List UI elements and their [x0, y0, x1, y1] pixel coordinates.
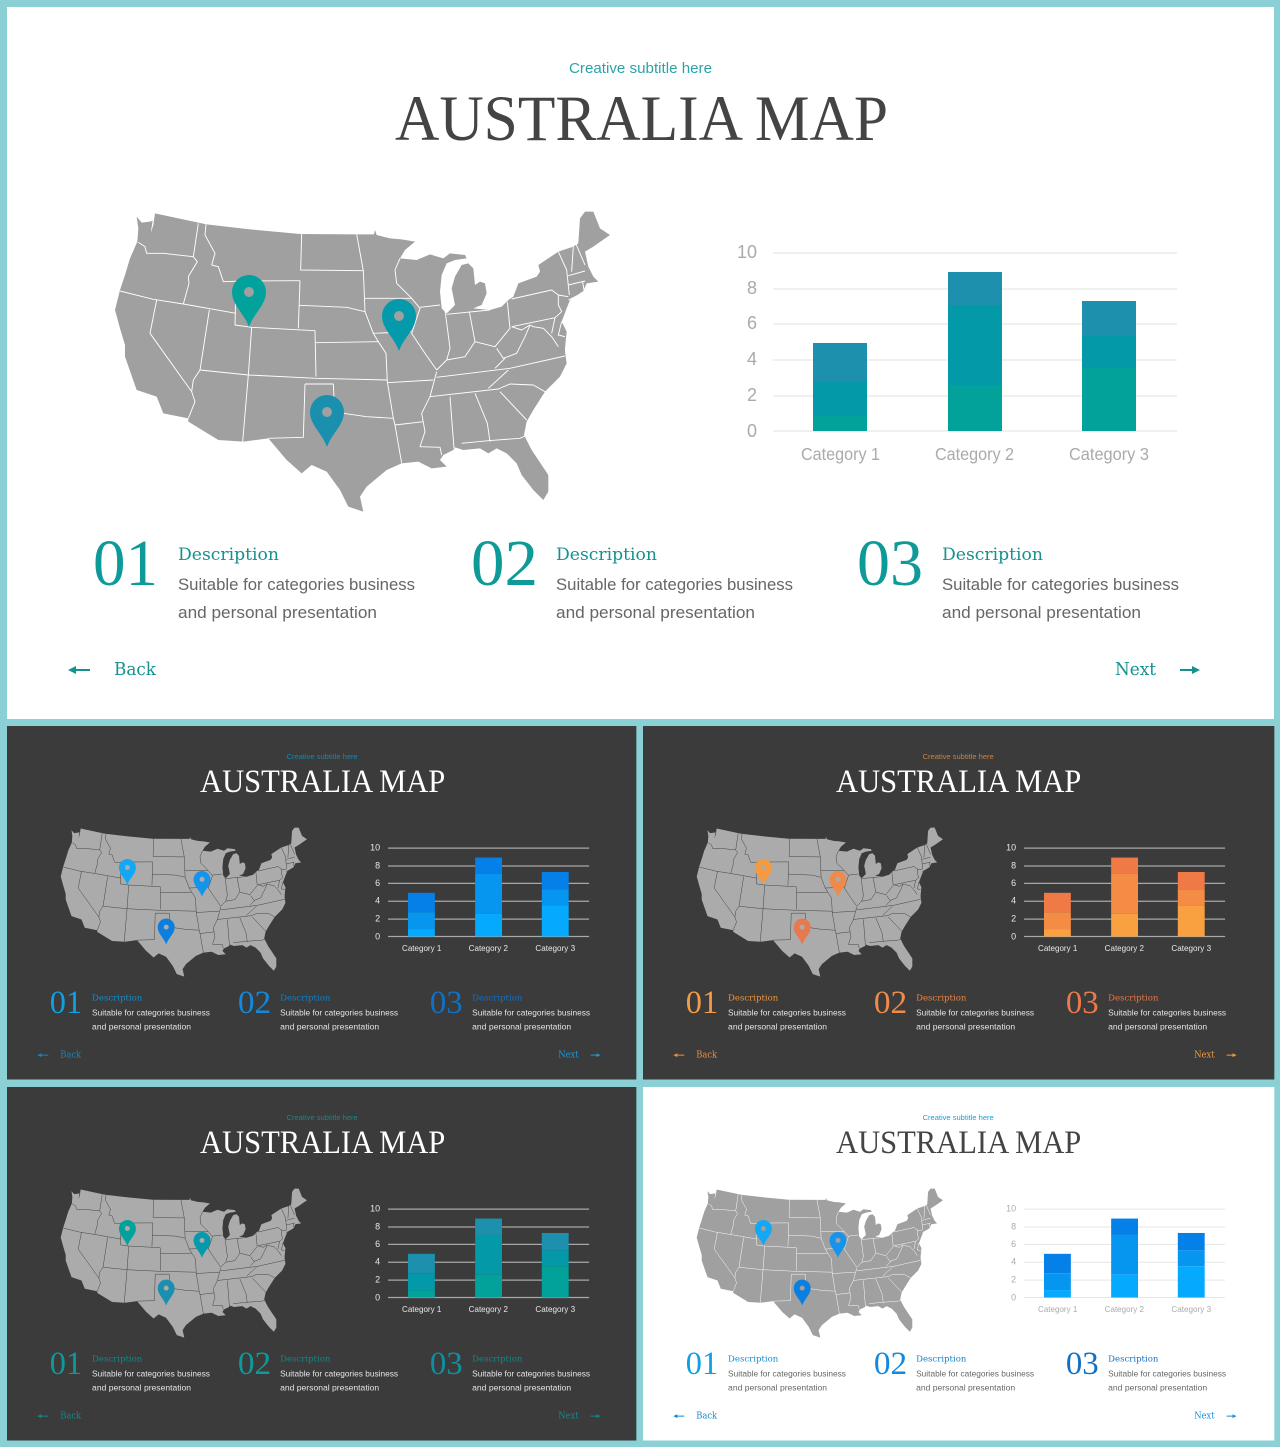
bar chart: Category 3	[1069, 444, 1149, 464]
item 01: 01	[93, 527, 158, 600]
item 02: Description	[916, 1354, 967, 1364]
item 02: and personal presentation	[280, 1021, 379, 1031]
bar chart: Category 1	[402, 1304, 441, 1314]
map of the USA with pins	[697, 1189, 943, 1338]
pin 1	[119, 1220, 136, 1246]
pin 2	[194, 871, 210, 897]
item 03: and personal presentation	[1108, 1021, 1207, 1031]
item 02: Suitable for categories business	[556, 575, 793, 594]
next link	[558, 1051, 601, 1061]
item 03: and personal presentation	[472, 1382, 571, 1392]
bar chart: Category 3	[1171, 943, 1211, 953]
pin 2	[830, 1232, 846, 1258]
bar chart: Category 2	[1105, 943, 1144, 953]
bar chart: 6	[1011, 878, 1016, 888]
title: AUSTRALIA MAP	[200, 1124, 445, 1160]
item 01	[50, 985, 210, 1031]
pin 2	[194, 1232, 210, 1258]
bar chart: 4	[747, 349, 757, 369]
pin 1	[755, 1220, 772, 1246]
bar chart: 2	[375, 914, 380, 924]
item 02: and personal presentation	[280, 1382, 379, 1392]
bar chart: 6	[375, 1239, 380, 1249]
bar chart	[1006, 1204, 1225, 1314]
item 03: Description	[1108, 1354, 1159, 1364]
bar chart: 4	[1011, 1257, 1016, 1267]
item 01: 01	[50, 985, 82, 1021]
bar chart: Category 1	[801, 444, 880, 464]
item 01: and personal presentation	[178, 603, 377, 622]
item 02: 02	[874, 985, 907, 1021]
bar chart: 6	[375, 878, 380, 888]
panel: dark teal slide	[7, 1087, 636, 1441]
item 01: Description	[728, 993, 779, 1003]
item 03: Description	[942, 545, 1043, 565]
item 02	[238, 1346, 398, 1392]
item 02: Suitable for categories business	[916, 1368, 1034, 1378]
back link	[673, 1051, 718, 1061]
bar chart: 8	[375, 861, 380, 870]
back link	[673, 1412, 718, 1422]
map of the USA with pins	[697, 828, 943, 977]
item 02: Description	[280, 1354, 331, 1364]
bar chart: 2	[1011, 1275, 1016, 1285]
item 02: 02	[238, 985, 271, 1021]
item 02: Description	[916, 993, 967, 1003]
back link	[68, 659, 157, 680]
bar chart: 4	[1011, 896, 1016, 906]
item 02: 02	[238, 1346, 271, 1382]
item 01	[93, 527, 415, 622]
next link: Next	[1194, 1412, 1215, 1422]
bar chart: 2	[747, 385, 757, 405]
title: AUSTRALIA MAP	[836, 1124, 1081, 1160]
next link	[1115, 659, 1200, 680]
bar chart: Category 1	[1038, 943, 1077, 953]
bar chart: 8	[375, 1222, 380, 1231]
bar chart: 10	[1006, 843, 1016, 853]
bar chart: 4	[375, 896, 380, 906]
item 03: Description	[1108, 993, 1159, 1003]
bar chart: Category 1	[1038, 1304, 1077, 1314]
title: AUSTRALIA MAP	[200, 763, 445, 799]
item 03: 03	[1066, 1346, 1099, 1382]
bar chart: Category 1	[402, 943, 441, 953]
item 03: 03	[857, 527, 923, 600]
panel: white blue slide	[643, 1087, 1274, 1441]
bar chart: Category 3	[1171, 1304, 1211, 1314]
item 03	[430, 1346, 590, 1392]
item 03	[857, 527, 1179, 622]
pin 2	[830, 871, 846, 897]
pin 3	[158, 1280, 175, 1305]
bar chart: 0	[1011, 1293, 1016, 1302]
bar chart: Category 2	[1105, 1304, 1144, 1314]
bar chart: 0	[375, 932, 380, 941]
item 01: Suitable for categories business	[92, 1007, 210, 1017]
bar chart: 10	[737, 242, 757, 262]
item 02	[471, 527, 793, 622]
back link: Back	[696, 1051, 718, 1061]
bar chart: 4	[375, 1257, 380, 1267]
item 02: Suitable for categories business	[280, 1368, 398, 1378]
next link: Next	[1115, 659, 1157, 680]
back link	[37, 1412, 82, 1422]
next link	[558, 1412, 601, 1422]
bar chart: 0	[747, 421, 757, 441]
bar chart	[737, 242, 1177, 464]
item 01	[686, 1346, 846, 1392]
pin 1	[119, 859, 136, 885]
bar chart: Category 2	[469, 1304, 508, 1314]
bar chart: 6	[1011, 1239, 1016, 1249]
panel: dark orange slide	[643, 726, 1274, 1080]
item 01: Description	[92, 993, 143, 1003]
item 01	[50, 1346, 210, 1392]
bar chart: Category 3	[535, 1304, 575, 1314]
subtitle: Creative subtitle here	[287, 1113, 358, 1122]
item 01: Suitable for categories business	[92, 1368, 210, 1378]
bar chart: 0	[1011, 932, 1016, 941]
subtitle: Creative subtitle here	[287, 752, 358, 761]
item 02: and personal presentation	[916, 1021, 1015, 1031]
pin 3	[158, 919, 175, 944]
back link: Back	[114, 659, 157, 680]
bar chart: 8	[1011, 861, 1016, 870]
bar chart: 10	[370, 843, 380, 853]
pin 2	[382, 299, 416, 351]
bar chart: Category 3	[535, 943, 575, 953]
item 03	[1066, 985, 1226, 1031]
item 01: Description	[178, 545, 279, 565]
item 01: Suitable for categories business	[178, 575, 415, 594]
item 01	[686, 985, 846, 1031]
map of the USA with pins	[115, 212, 610, 512]
item 02: Description	[556, 545, 657, 565]
next link	[1194, 1051, 1237, 1061]
title: AUSTRALIA MAP	[836, 763, 1081, 799]
item 01: Suitable for categories business	[728, 1368, 846, 1378]
bar chart: 6	[747, 313, 757, 333]
panel: white teal main slide	[7, 7, 1274, 719]
next link	[1194, 1412, 1237, 1422]
pin 1	[232, 275, 266, 327]
item 02: and personal presentation	[556, 603, 755, 622]
map of the USA with pins	[61, 1189, 307, 1338]
next link: Next	[1194, 1051, 1215, 1061]
pin 3	[794, 1280, 811, 1305]
item 02	[874, 1346, 1034, 1392]
title: AUSTRALIA MAP	[395, 83, 888, 155]
bar chart: Category 2	[935, 444, 1014, 464]
item 01: 01	[50, 1346, 82, 1382]
bar chart	[1006, 843, 1225, 953]
item 02: 02	[471, 527, 538, 600]
back link: Back	[60, 1412, 82, 1422]
item 03: Suitable for categories business	[472, 1007, 590, 1017]
item 02: Suitable for categories business	[280, 1007, 398, 1017]
item 03: 03	[1066, 985, 1099, 1021]
item 01: and personal presentation	[92, 1382, 191, 1392]
back link: Back	[696, 1412, 718, 1422]
bar chart	[370, 843, 589, 953]
pin 3	[794, 919, 811, 944]
item 01: 01	[686, 985, 718, 1021]
subtitle: Creative subtitle here	[923, 1113, 994, 1122]
item 03	[1066, 1346, 1226, 1392]
item 02: 02	[874, 1346, 907, 1382]
next link: Next	[558, 1051, 579, 1061]
subtitle: Creative subtitle here	[923, 752, 994, 761]
item 03: Suitable for categories business	[942, 575, 1179, 594]
item 03: 03	[430, 985, 463, 1021]
item 03: Suitable for categories business	[1108, 1007, 1226, 1017]
item 03: Suitable for categories business	[1108, 1368, 1226, 1378]
bar chart: 0	[375, 1293, 380, 1302]
item 01: Suitable for categories business	[728, 1007, 846, 1017]
item 03: and personal presentation	[1108, 1382, 1207, 1392]
panel: dark blue slide	[7, 726, 636, 1080]
item 01: 01	[686, 1346, 718, 1382]
back link: Back	[60, 1051, 82, 1061]
pin 1	[755, 859, 772, 885]
item 02: Suitable for categories business	[916, 1007, 1034, 1017]
item 02: and personal presentation	[916, 1382, 1015, 1392]
item 02: Description	[280, 993, 331, 1003]
bar chart: Category 2	[469, 943, 508, 953]
back link	[37, 1051, 82, 1061]
item 03: 03	[430, 1346, 463, 1382]
bar chart: 10	[1006, 1204, 1016, 1214]
pin 3	[310, 395, 344, 447]
item 03: Description	[472, 993, 523, 1003]
item 02	[238, 985, 398, 1031]
bar chart: 10	[370, 1204, 380, 1214]
item 03	[430, 985, 590, 1031]
bar chart: 8	[747, 278, 757, 298]
item 03: and personal presentation	[942, 603, 1141, 622]
bar chart: 2	[375, 1275, 380, 1285]
item 03: Suitable for categories business	[472, 1368, 590, 1378]
item 02	[874, 985, 1034, 1031]
item 01: Description	[92, 1354, 143, 1364]
map of the USA with pins	[61, 828, 307, 977]
bar chart: 8	[1011, 1222, 1016, 1231]
next link: Next	[558, 1412, 579, 1422]
bar chart: 2	[1011, 914, 1016, 924]
item 01: Description	[728, 1354, 779, 1364]
item 03: and personal presentation	[472, 1021, 571, 1031]
item 01: and personal presentation	[728, 1382, 827, 1392]
item 01: and personal presentation	[92, 1021, 191, 1031]
subtitle: Creative subtitle here	[569, 60, 712, 77]
item 03: Description	[472, 1354, 523, 1364]
item 01: and personal presentation	[728, 1021, 827, 1031]
bar chart	[370, 1204, 589, 1314]
